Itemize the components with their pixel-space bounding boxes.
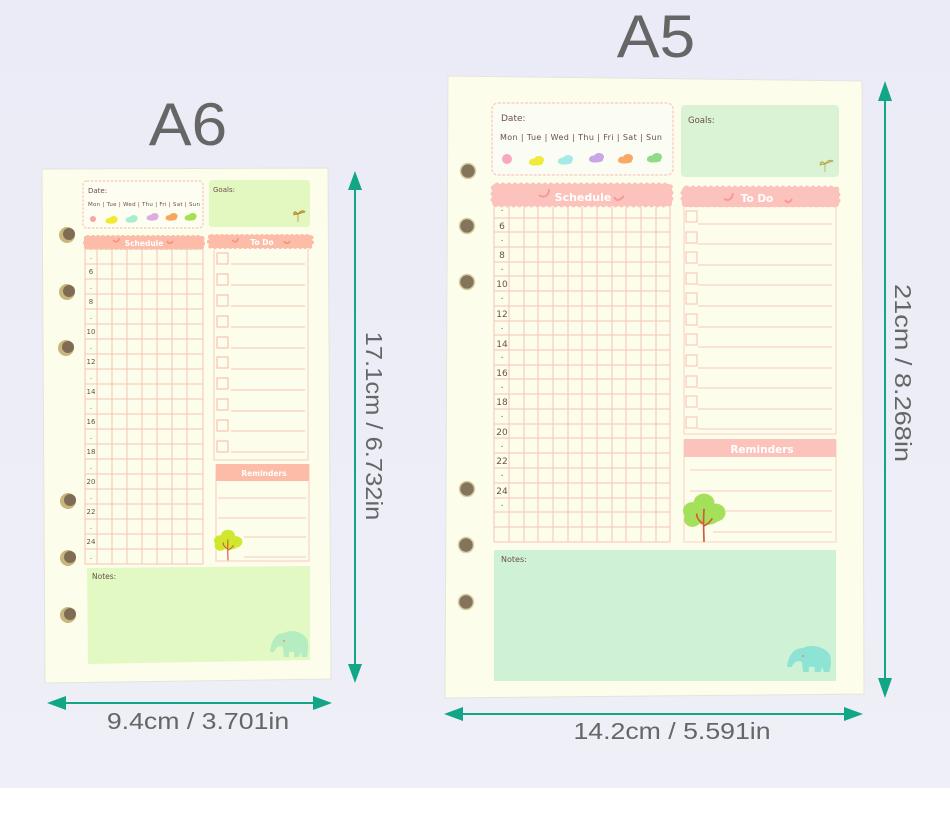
icon: A6 tree xyxy=(214,530,242,560)
A5 to do banner xyxy=(682,187,839,207)
A6 goals box: Goals: xyxy=(213,186,235,194)
icon: A6 elephant xyxy=(270,631,308,657)
A6 hour labels: 10 xyxy=(87,328,95,336)
A6 to do banner xyxy=(209,235,312,248)
A5 schedule grid xyxy=(494,204,670,542)
A5 hour labels: . xyxy=(501,234,503,244)
A6 schedule banner: Schedule xyxy=(125,239,163,248)
A6 hour labels: 22 xyxy=(87,508,95,516)
A5 reminders xyxy=(683,439,836,542)
A6 date box: Mon | Tue | Wed | Thu | Fri | Sat | Sun xyxy=(88,202,200,208)
A6 hour labels: 18 xyxy=(87,448,95,456)
A6 hour labels: . xyxy=(90,253,92,261)
A6 to do list xyxy=(214,249,308,460)
A5 hour labels: . xyxy=(501,410,503,420)
A6 hour labels: 6 xyxy=(89,268,94,276)
A5 hour labels: . xyxy=(501,263,503,273)
A6 hour labels: 16 xyxy=(87,418,96,426)
panel: A5 planner page xyxy=(445,76,864,698)
label: A6 width: 9.4cm / 3.701in xyxy=(107,709,289,735)
A6 reminders: Reminders xyxy=(241,469,287,478)
A6 reminders xyxy=(214,464,309,561)
A5 to do banner: To Do xyxy=(741,193,773,205)
A6 hour labels: 12 xyxy=(87,358,95,366)
A6 hour labels: . xyxy=(90,283,92,291)
A6 goals box xyxy=(209,180,310,227)
A6 schedule grid xyxy=(85,249,203,564)
A6 hour labels: 24 xyxy=(87,538,96,546)
A6 hour labels: 14 xyxy=(87,388,96,396)
icon: A5 elephant xyxy=(787,646,831,672)
A5 hour labels: . xyxy=(501,381,503,391)
A6 hour labels: . xyxy=(90,553,92,561)
A6 hour labels: . xyxy=(90,463,92,471)
A5 hour labels: 12 xyxy=(496,310,508,320)
A5 date box xyxy=(492,103,673,175)
A6 hour labels: . xyxy=(90,433,92,441)
A6 hour labels: 20 xyxy=(87,478,95,486)
arrow: A5 height xyxy=(878,81,892,698)
A5 hour labels: 10 xyxy=(496,280,508,290)
A5 hour labels: 14 xyxy=(496,340,508,350)
A6 notes box xyxy=(87,566,310,664)
A5 binder holes xyxy=(458,164,476,610)
heading: A5: A5 xyxy=(617,4,695,71)
A6 hour labels xyxy=(87,253,96,561)
A5 hour labels: . xyxy=(501,351,503,361)
A5 hour labels xyxy=(496,204,508,509)
A5 schedule banner xyxy=(492,184,672,206)
arrow: A6 width xyxy=(47,696,332,710)
A5 date box: Mon | Tue | Wed | Thu | Fri | Sat | Sun xyxy=(500,133,662,142)
arrow: A6 height xyxy=(348,171,362,683)
A5 reminders: Reminders xyxy=(730,444,794,456)
A5 hour labels: . xyxy=(501,499,503,509)
A5 hour labels: . xyxy=(501,204,503,214)
A6 hour labels: . xyxy=(90,523,92,531)
A5 hour labels: . xyxy=(501,469,503,479)
A5 hour labels: 18 xyxy=(496,398,508,408)
A5 to do list xyxy=(684,207,836,434)
A6 hour labels: . xyxy=(90,403,92,411)
heading: A6: A6 xyxy=(149,92,227,159)
A5 hour labels: . xyxy=(501,322,503,332)
A6 to do banner: To Do xyxy=(250,238,274,247)
A5 hour labels: 20 xyxy=(496,428,508,438)
A5 schedule banner: Schedule xyxy=(555,191,611,204)
A6 binder holes xyxy=(58,227,76,623)
A5 goals box: Goals: xyxy=(688,116,715,126)
label: A6 height: 17.1cm / 6.732in xyxy=(360,332,386,520)
A5 hour labels: 6 xyxy=(499,222,505,232)
A5 hour labels: 8 xyxy=(499,251,505,261)
A5 hour labels: . xyxy=(501,292,503,302)
A5 hour labels: . xyxy=(501,440,503,450)
panel: A6 planner page xyxy=(42,168,331,683)
icon: A5 tree xyxy=(683,494,726,542)
A6 notes box: Notes: xyxy=(92,572,116,581)
A5 date box: Date: xyxy=(501,114,526,124)
A5 hour labels: 24 xyxy=(496,487,508,497)
A6 date box: Date: xyxy=(88,187,107,195)
A6 hour labels: . xyxy=(90,493,92,501)
A6 hour labels: . xyxy=(90,343,92,351)
A5 hour labels: 22 xyxy=(496,457,508,467)
A5 notes box xyxy=(494,550,836,681)
A5 hour labels: 16 xyxy=(496,369,508,379)
arrow: A5 width xyxy=(444,707,863,721)
A6 hour labels: 8 xyxy=(89,298,93,306)
A6 date box xyxy=(83,181,203,228)
A6 hour labels: . xyxy=(90,313,92,321)
label: A5 height: 21cm / 8.268in xyxy=(890,284,915,462)
A5 notes box: Notes: xyxy=(501,555,527,564)
A6 hour labels: . xyxy=(90,373,92,381)
A6 schedule banner xyxy=(84,236,204,249)
label: A5 width: 14.2cm / 5.591in xyxy=(573,719,771,745)
A5 goals box xyxy=(681,105,839,177)
